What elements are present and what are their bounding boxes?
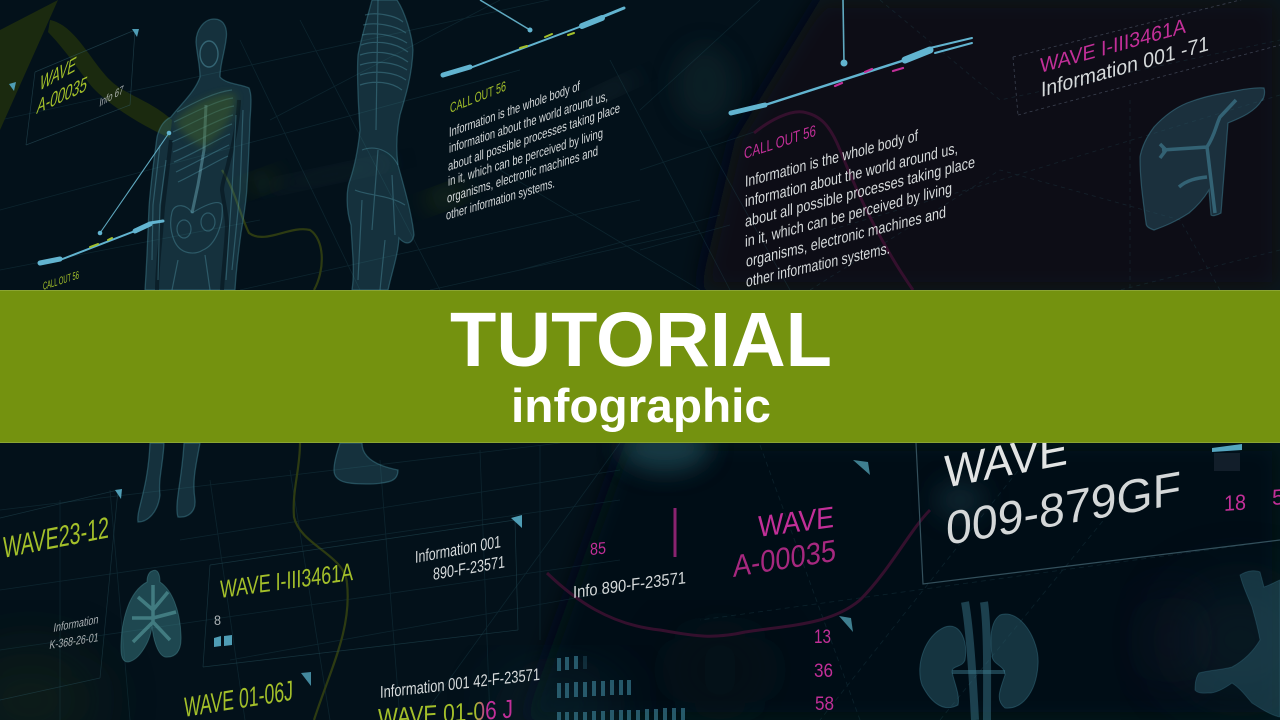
magenta curves xyxy=(547,112,930,636)
label box: WAVE 009-879GF: WAVE xyxy=(944,422,1068,498)
callout text: middle: Information is the whole body of xyxy=(449,77,580,140)
callout text: right xyxy=(744,122,975,291)
bar meter xyxy=(557,656,685,720)
callout text: right: organisms, electronic machines and xyxy=(746,203,946,271)
info: 85: 85 xyxy=(590,539,606,559)
label box: WAVE I-III3461A lower: WAVE I-III3461A xyxy=(220,558,353,604)
label box: WAVE A-00035: A-00035 xyxy=(35,71,89,119)
callout device: top right xyxy=(731,38,972,113)
numbers column: 58 xyxy=(815,694,834,715)
info: 85: Info 890-F-23571 xyxy=(573,568,686,602)
label: WAVE A-00035 magenta: A-00035 xyxy=(733,533,836,584)
title banner xyxy=(0,290,1280,443)
label box: WAVE A-00035: Info 67 xyxy=(99,83,124,110)
subtitle: infographic xyxy=(511,379,771,432)
label box: WAVE 01-06J xyxy=(184,665,540,720)
pointer: left figure xyxy=(98,131,171,235)
figure legs xyxy=(138,443,398,522)
callout text: right: information about the world around us, xyxy=(745,139,958,211)
callout text: middle: about all possible processes taking place xyxy=(448,99,620,174)
triangle markers top left xyxy=(9,29,139,91)
label box: WAVE 009-879GF: 18 xyxy=(1224,489,1246,516)
callout text: middle: information about the world around us, xyxy=(449,87,608,156)
olive connector curves xyxy=(222,170,348,720)
callout text: right: CALL OUT 56 xyxy=(744,122,816,163)
callout text: middle: in it, which can be perceived by living xyxy=(448,124,603,189)
label box: WAVE I-III3461A lower: 890-F-23571 xyxy=(433,551,505,584)
callout text: middle: CALL OUT 56 xyxy=(450,79,506,117)
title: TUTORIAL xyxy=(450,297,832,383)
callout text: middle: organisms, electronic machines and xyxy=(447,142,598,206)
label box: WAVE23-12: Information xyxy=(53,612,100,635)
info: 85 xyxy=(573,508,686,602)
callout device: top middle xyxy=(443,8,624,75)
label box: WAVE23-12: WAVE23-12 xyxy=(3,512,109,565)
callout text: right: Information is the whole body of xyxy=(745,127,918,191)
label: WAVE A-00035 magenta: WAVE xyxy=(758,501,834,544)
label box: WAVE I-III3461A xyxy=(1013,0,1280,115)
callout text: right: other information systems. xyxy=(746,239,890,291)
icon: kidneys xyxy=(920,602,1038,720)
callout text: right: about all possible processes taking place xyxy=(745,153,975,231)
numbers column: 13 xyxy=(814,627,831,648)
numbers column xyxy=(814,627,834,715)
icon: lungs xyxy=(121,570,181,662)
label box: WAVE23-12 xyxy=(0,489,122,700)
label box: WAVE I-III3461A: Information 001 -71 xyxy=(1041,31,1209,102)
label box: WAVE A-00035: WAVE xyxy=(38,52,78,96)
human figure front view xyxy=(145,19,251,290)
label box: WAVE 009-879GF xyxy=(916,422,1280,584)
icon: stomach xyxy=(1195,571,1280,717)
label box: WAVE23-12: K-368-26-01 xyxy=(49,630,100,652)
callout text: middle: other information systems. xyxy=(446,175,555,223)
partial callout under left figure: CALL OUT 56 xyxy=(43,270,79,293)
pointer: top right xyxy=(840,0,848,66)
label: WAVE A-00035 magenta xyxy=(733,460,870,632)
label box: WAVE I-III3461A lower: 8 xyxy=(214,612,221,628)
human figure side view xyxy=(347,0,414,290)
callout device: left figure xyxy=(40,221,163,263)
callout text: middle xyxy=(446,77,620,223)
icon: liver xyxy=(1140,88,1265,230)
callout text: right: in it, which can be perceived by living xyxy=(745,179,952,251)
label box: WAVE I-III3461A lower: Information 001 xyxy=(415,531,501,567)
label box: WAVE I-III3461A: WAVE I-III3461A xyxy=(1040,14,1187,78)
label box: WAVE 009-879GF: 009-879GF xyxy=(946,462,1181,556)
green flow shape xyxy=(0,0,172,138)
label box: WAVE A-00035 xyxy=(26,30,135,145)
label box: WAVE I-III3461A lower xyxy=(203,515,522,667)
numbers column: 36 xyxy=(814,661,833,682)
pointer: top middle xyxy=(480,0,532,32)
label box: WAVE 01-06J: Information 001 42-F-23571 xyxy=(380,665,540,702)
